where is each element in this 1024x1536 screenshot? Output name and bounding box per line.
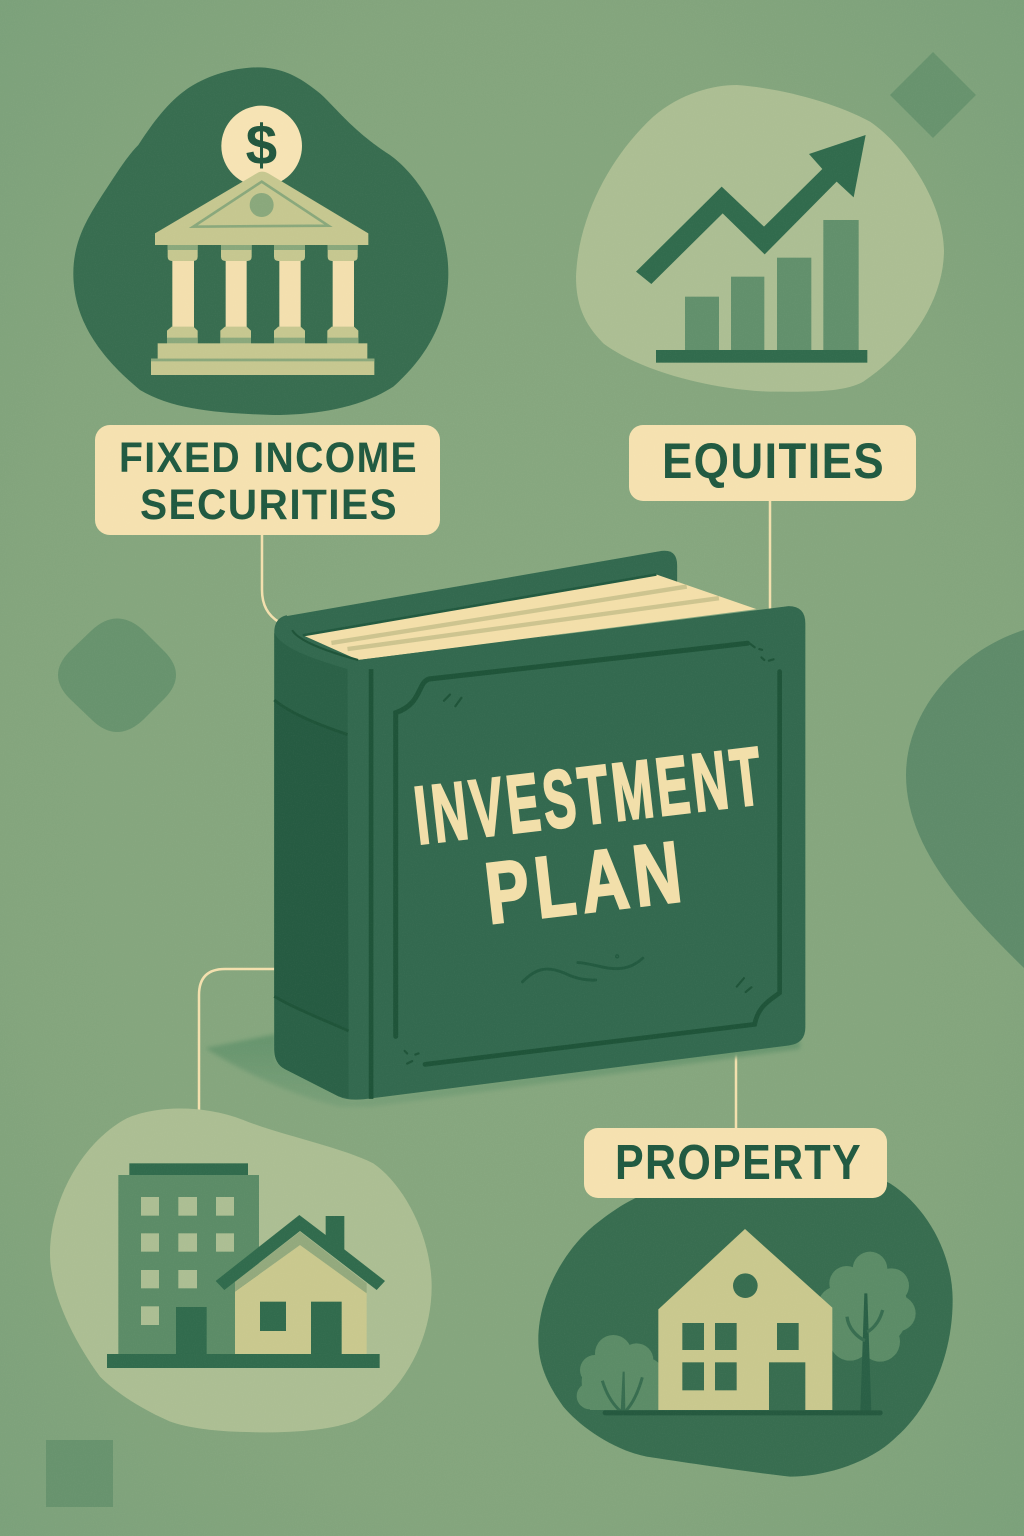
book shadow xyxy=(205,1034,800,1107)
icon: small house xyxy=(216,1215,385,1355)
icon: dollar coin xyxy=(221,106,302,186)
connector: equities to book xyxy=(769,501,771,610)
book pages xyxy=(303,575,756,660)
blob: property background xyxy=(538,1172,953,1477)
book title: INVESTMENT xyxy=(410,731,770,862)
icon: bank roof xyxy=(155,172,368,245)
icon: tree xyxy=(818,1252,916,1412)
icon panel: property house xyxy=(538,1172,953,1477)
blob: buildings background xyxy=(50,1109,432,1432)
book back cover xyxy=(285,551,677,664)
arrow: upward trend xyxy=(636,135,866,284)
icon: ground line xyxy=(603,1410,883,1415)
book: investment plan xyxy=(274,551,805,1100)
book top edge line xyxy=(292,630,358,660)
book title xyxy=(410,731,770,943)
label: fixed income securities xyxy=(95,425,440,535)
label: fixed income securities: SECURITIES xyxy=(140,481,398,529)
icon panel: apartment and house xyxy=(50,1109,432,1432)
chart: baseline xyxy=(656,350,867,363)
blob: chart background xyxy=(576,85,944,392)
label: property: PROPERTY xyxy=(615,1136,862,1190)
label: property xyxy=(584,1128,887,1198)
icon: apartment building xyxy=(118,1163,259,1355)
icon: ground line xyxy=(107,1354,380,1368)
book cover frame xyxy=(396,643,780,1064)
connector: real estate to book xyxy=(199,969,275,1110)
icon: bush xyxy=(577,1335,668,1412)
background shape: square bottom left xyxy=(46,1440,113,1507)
book spine groove xyxy=(365,669,378,1099)
book squiggle ornament xyxy=(522,956,643,982)
icon panel: bank xyxy=(73,67,448,415)
blob: bank background xyxy=(73,67,448,415)
label: equities: EQUITIES xyxy=(662,433,885,489)
background shape: diamond top right xyxy=(890,52,976,138)
chart: bars xyxy=(685,220,859,350)
connector: property to book xyxy=(735,1040,737,1130)
background shape: blob right edge xyxy=(906,630,1024,968)
icon: bank columns xyxy=(167,245,358,343)
book title: PLAN xyxy=(481,823,692,943)
icon panel: growth chart xyxy=(576,85,944,392)
label: fixed income securities: FIXED INCOME xyxy=(119,434,418,482)
book front cover and spine edge xyxy=(274,606,805,1100)
icon: dollar coin: $ xyxy=(246,114,277,177)
connector: fixed income to book xyxy=(262,535,279,622)
book spine side xyxy=(274,633,349,1098)
icon: bank steps xyxy=(151,343,374,375)
background shape: rounded diamond left xyxy=(58,618,176,732)
icon: house xyxy=(658,1229,832,1411)
label: equities xyxy=(629,425,916,501)
